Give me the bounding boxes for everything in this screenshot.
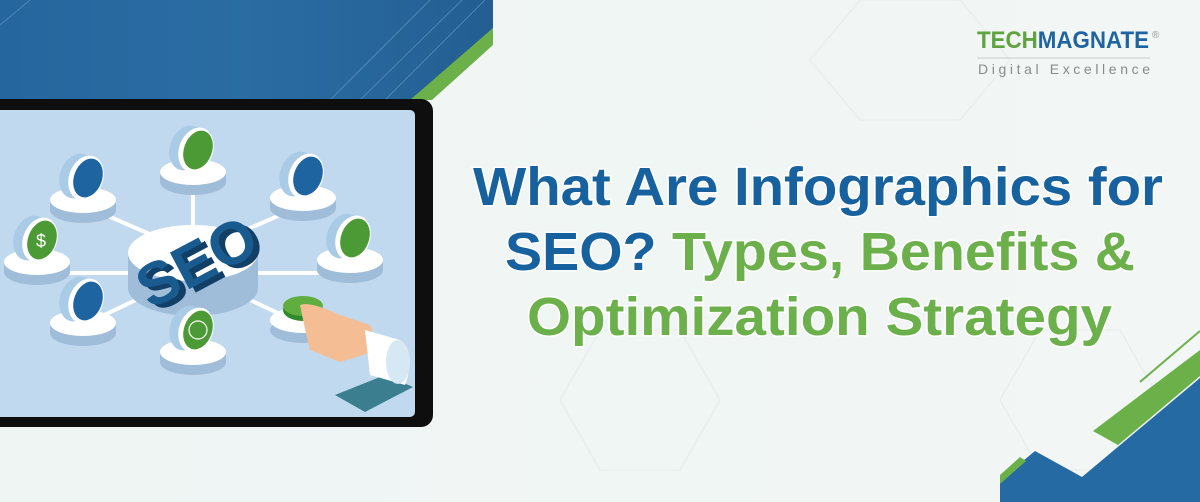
SEO hub: SEO bbox=[131, 206, 275, 325]
tablet illustration bbox=[0, 99, 433, 427]
title: SEO? Types, Benefits & bbox=[505, 222, 1135, 282]
bottom-right corner shapes bbox=[1000, 331, 1200, 502]
SEO hub: SEO bbox=[125, 203, 268, 321]
push button with hand bbox=[270, 296, 413, 412]
node icons: $ bbox=[36, 231, 46, 251]
logo bbox=[977, 27, 1160, 77]
title bbox=[473, 157, 1163, 347]
top-left blue banner bbox=[0, 0, 493, 100]
logo: Digital Excellence bbox=[978, 61, 1150, 77]
node icons bbox=[4, 121, 383, 375]
title: Optimization Strategy bbox=[527, 287, 1112, 347]
logo: TECHMAGNATE bbox=[977, 27, 1149, 54]
title: What Are Infographics for bbox=[473, 157, 1163, 217]
logo: ® bbox=[1152, 30, 1160, 41]
